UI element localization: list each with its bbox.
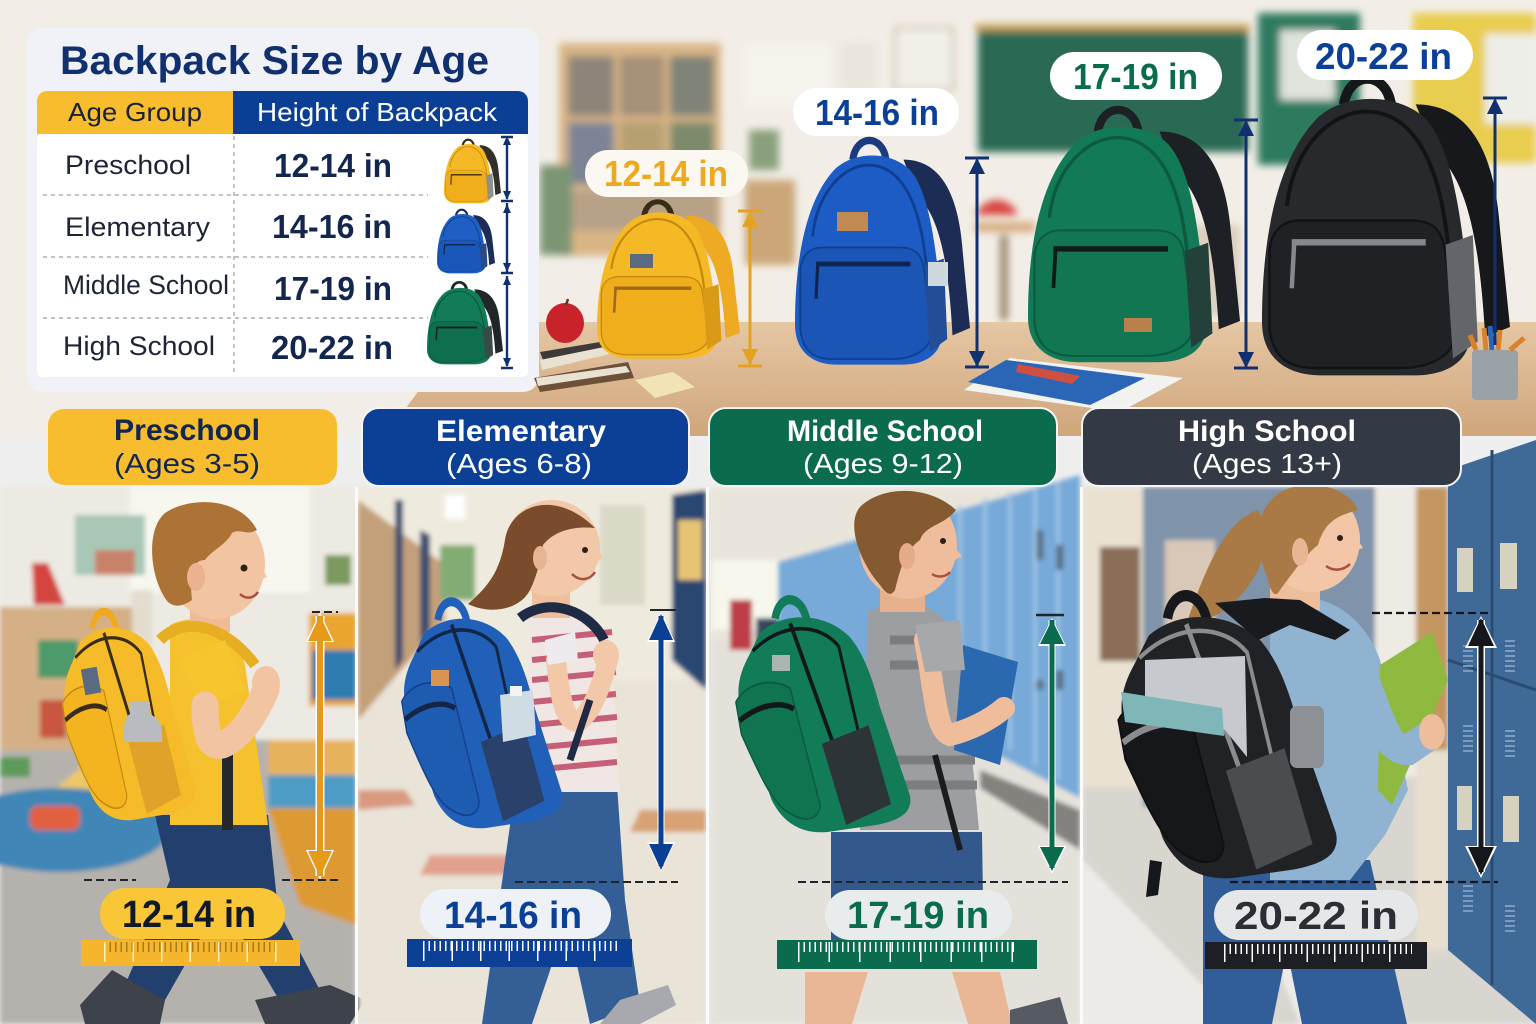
heading: preschool: (Ages 3-5)	[114, 448, 260, 479]
label: 17-19 in: 17-19 in	[1073, 56, 1198, 97]
water bottle	[124, 702, 162, 742]
row values: 17-19 in	[274, 270, 392, 307]
middle school height arrow	[1038, 618, 1066, 874]
heading: high school	[1082, 408, 1461, 486]
elementary arm	[520, 607, 619, 760]
table body	[37, 134, 528, 377]
middle school backpack	[736, 600, 910, 832]
books and apple	[534, 299, 695, 398]
label: 12-14 in: 12-14 in	[604, 153, 728, 194]
pencil cup	[1470, 326, 1524, 400]
preschool child	[80, 502, 365, 1024]
elementary child	[468, 500, 676, 1024]
row values: 14-16 in	[272, 208, 392, 245]
header: height	[233, 91, 528, 134]
header: age group	[37, 91, 233, 134]
header labels	[68, 97, 498, 127]
row labels	[63, 150, 229, 361]
elementary measurement label: 14-16 in	[444, 895, 582, 937]
corridor background	[1083, 487, 1536, 1024]
backpack: blue elementary	[795, 140, 970, 365]
high school measurement label	[1214, 890, 1418, 940]
middle school strap	[935, 755, 960, 850]
panel: middle school scene	[710, 475, 1080, 1024]
heading: preschool: Preschool	[114, 414, 260, 447]
heading: elementary: (Ages 6-8)	[446, 448, 592, 479]
middle school child	[805, 491, 1068, 1024]
apple	[546, 303, 584, 343]
note pad	[635, 372, 695, 398]
arrow: blue height	[965, 158, 989, 367]
preschool height arrow	[306, 612, 334, 880]
panel: high school scene	[1083, 440, 1536, 1024]
backpack: green middle school	[1028, 110, 1240, 362]
notebook	[964, 358, 1183, 412]
preschool arm and strap	[160, 626, 280, 830]
lockers	[1448, 440, 1536, 1024]
label: 20-22 in: 20-22 in	[1315, 36, 1452, 77]
backpack: yellow preschool	[597, 202, 740, 359]
heading: elementary	[362, 408, 689, 486]
preschool ruler	[81, 940, 300, 966]
room background	[0, 487, 356, 1024]
label: 20-22 in	[1297, 30, 1473, 80]
mini backpacks	[427, 140, 503, 364]
legs	[125, 815, 325, 1010]
row values: 12-14 in	[274, 147, 392, 184]
head	[190, 600, 230, 632]
heading: middle school	[709, 408, 1057, 486]
header labels: Age Group	[68, 97, 202, 127]
high school height arrow	[1465, 616, 1497, 878]
torso	[170, 619, 268, 825]
hallway with lockers	[710, 475, 1080, 1024]
label: 14-16 in	[793, 88, 959, 136]
wooden table	[385, 322, 1536, 436]
preschool measurement label: 12-14 in	[122, 894, 256, 936]
heading: high school: (Ages 13+)	[1192, 448, 1342, 479]
hallway background	[358, 487, 706, 1024]
heading: middle school: (Ages 9-12)	[803, 448, 963, 479]
label: 14-16 in: 14-16 in	[815, 92, 939, 133]
elementary measurement label	[420, 889, 611, 939]
preschool measurement label	[100, 888, 285, 939]
header labels: Height of Backpack	[257, 97, 498, 127]
high school student	[1187, 485, 1448, 1024]
preschool backpack	[62, 612, 196, 820]
panel: preschool scene	[0, 487, 365, 1024]
heading: high school: High School	[1178, 415, 1356, 448]
heading: preschool	[48, 409, 337, 485]
high school measurement label: 20-22 in	[1234, 895, 1398, 938]
high school ruler	[1205, 942, 1427, 969]
heading: elementary: Elementary	[436, 415, 606, 448]
middle school measurement label	[825, 890, 1012, 940]
panel: elementary scene	[358, 487, 706, 1024]
elementary height arrow	[647, 612, 675, 872]
arrow: yellow height	[738, 211, 762, 366]
panel: size table	[27, 28, 539, 392]
title: Backpack Size by Age	[60, 39, 489, 83]
middle school ruler	[777, 940, 1037, 969]
row values: 20-22 in	[271, 329, 393, 366]
label: 17-19 in	[1050, 52, 1222, 100]
classroom background	[0, 0, 1536, 436]
mini height arrows	[501, 136, 513, 368]
heading: middle school: Middle School	[787, 415, 983, 448]
middle school measurement label: 17-19 in	[847, 895, 989, 937]
elementary backpack	[402, 602, 562, 828]
row labels: Preschool	[65, 150, 191, 180]
white panel separators	[356, 487, 1082, 1024]
arrow: black height	[1483, 98, 1507, 345]
elementary ruler	[407, 939, 632, 967]
arrow: green height	[1234, 120, 1258, 368]
high school backpack	[1118, 596, 1350, 897]
row labels: High School	[63, 331, 215, 361]
row labels: Elementary	[65, 212, 211, 242]
row labels: Middle School	[63, 270, 229, 300]
backpack: black high school	[1262, 79, 1510, 375]
row values	[271, 147, 393, 366]
laptop and folder	[1121, 656, 1324, 768]
